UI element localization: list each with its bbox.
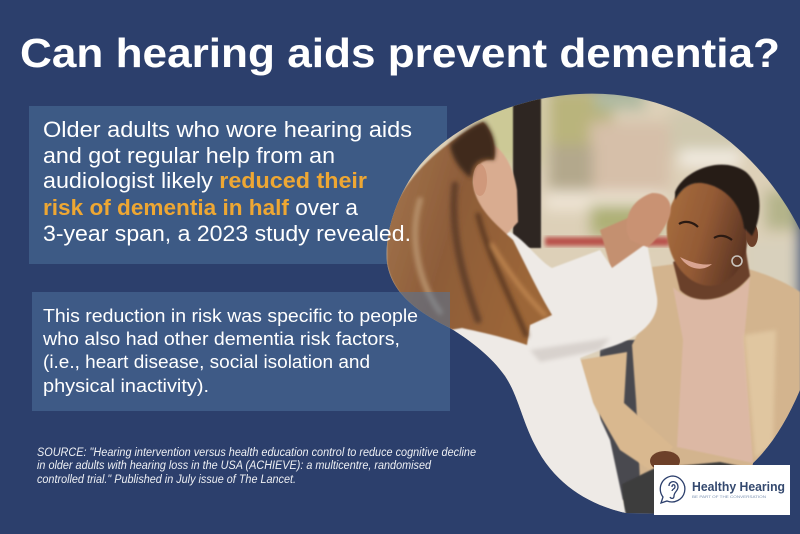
patient ear [746,226,758,247]
text block: main finding: Older adults who wore hearing aids [43,117,412,142]
source citation: controlled trial." Published in July issue of The Lancet. [37,474,296,486]
logo wordmark: Healthy Hearing [692,479,785,494]
text block: main finding [43,117,412,246]
audiologist white coat [440,232,657,530]
patient hand [650,451,680,468]
source citation [37,447,476,486]
patient earring [732,256,742,266]
audiologist forearm [600,218,642,268]
coat shading [530,338,610,362]
cardigan placket [744,330,776,458]
audiologist hand [627,193,671,247]
logo tagline: BE PART OF THE CONVERSATION [692,494,766,499]
text panel: main finding background [29,106,447,264]
text panel: risk factors background [32,292,450,411]
patient hair [675,165,760,236]
audiologist ear [473,164,487,196]
source citation: SOURCE: "Hearing intervention versus health education control to reduce cognitive decline [37,447,476,459]
logo: Healthy Hearing [654,465,790,515]
text block: risk factors: who also had other dementia risk factors, [42,328,400,349]
patient neck [673,245,750,299]
audiologist hair [387,122,552,345]
patient cardigan [632,262,800,530]
text block: main finding: 3-year span, a 2023 study revealed. [43,221,411,246]
audiologist face and neck [473,146,519,235]
photo backdrop: blurred garden through window [380,85,800,525]
red strip [545,237,670,246]
text block: risk factors [42,305,418,396]
patient pink top [673,277,753,463]
text block: risk factors: This reduction in risk was specific to people [43,305,418,326]
text block: main finding: and got regular help from an [43,143,335,168]
text block: risk factors: (i.e., heart disease, social isolation and [43,351,370,372]
photo: audiologist fitting a hearing aid on a patient [380,85,800,530]
source citation: in older adults with hearing loss in the USA (ACHIEVE): a multicentre, randomised [37,460,432,472]
patient trousers [622,461,740,514]
text block: main finding: audiologist likely reduced their [43,168,367,193]
hair streaks [415,185,545,335]
icon: ear in speech bubble [660,476,685,503]
window frame [513,98,541,248]
hair dark crown [450,122,495,178]
patient face [666,182,748,286]
patient sleeve [580,351,640,464]
title: Can hearing aids prevent dementia? [20,30,780,76]
chair gap [599,339,641,500]
patient eyes and mouth [679,222,732,269]
text block: risk factors: physical inactivity). [43,375,209,396]
text block: main finding: risk of dementia in half over a [43,195,359,220]
